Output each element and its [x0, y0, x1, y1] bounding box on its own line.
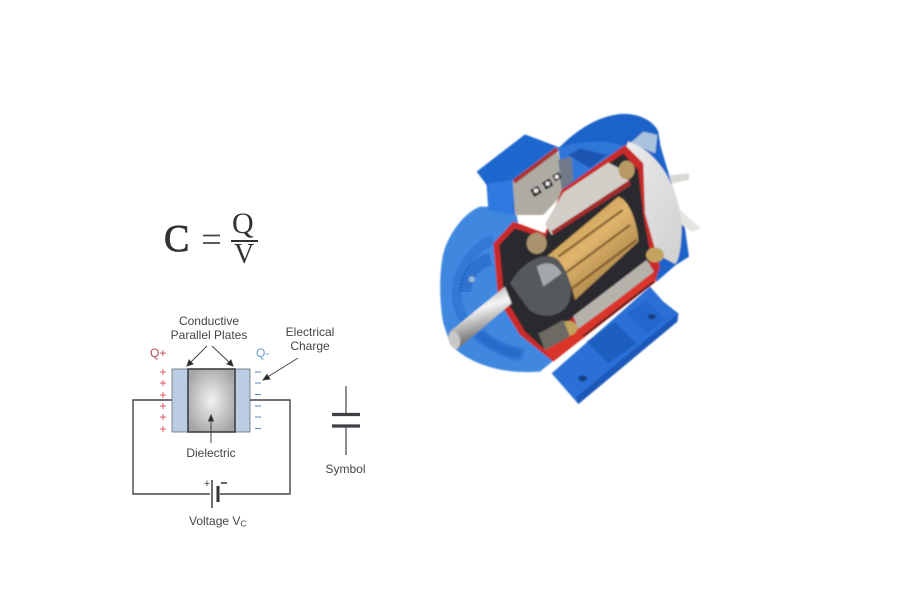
formula symbol C: C	[164, 218, 189, 260]
dark motor interior	[499, 153, 652, 348]
label conductive parallel plates: Parallel Plates	[171, 328, 247, 342]
label conductive parallel plates: Conductive	[179, 314, 239, 328]
positive charges: +	[159, 410, 167, 424]
formula: capacitance equals charge over voltage	[164, 207, 258, 270]
label dielectric: Dielectric	[186, 446, 236, 460]
capacitor circuit diagram	[133, 314, 366, 528]
gold rotor	[547, 197, 638, 300]
arrows to plates	[187, 346, 233, 366]
label Q+: Q+	[150, 346, 166, 360]
upper stator	[527, 161, 635, 254]
lower stator	[543, 248, 664, 361]
right conductive plate	[235, 369, 250, 432]
positive charges	[159, 365, 167, 436]
positive charges: +	[159, 399, 167, 413]
label voltage: Voltage V	[189, 514, 240, 528]
circuit wire	[133, 400, 290, 494]
capacitor symbol	[332, 386, 360, 455]
electric motor cutaway illustration	[440, 114, 701, 404]
label electrical charge: Charge	[290, 339, 330, 353]
arrow to charge	[263, 358, 298, 380]
positive charges: +	[159, 376, 167, 390]
equals sign	[203, 236, 220, 243]
label Q-: Q-	[256, 346, 269, 360]
mounting feet	[552, 287, 678, 404]
label voltage: C	[240, 518, 247, 528]
motor front end bell	[440, 207, 558, 372]
label electrical charge: Electrical	[286, 325, 334, 339]
positive charges: +	[159, 365, 167, 379]
denominator V: V	[234, 239, 254, 270]
red cutaway housing	[493, 145, 660, 362]
numerator Q: Q	[232, 207, 254, 240]
cooling fan	[617, 142, 701, 264]
end winding	[538, 320, 570, 350]
battery symbol: +	[204, 478, 210, 490]
left conductive plate	[172, 369, 188, 432]
fan cover top	[558, 114, 689, 282]
positive charges: +	[159, 388, 167, 402]
terminal box	[477, 134, 573, 215]
positive charges: +	[159, 422, 167, 436]
fraction bar	[231, 240, 258, 242]
dielectric block	[188, 369, 235, 432]
label symbol: Symbol	[325, 462, 366, 476]
arrow to dielectric	[208, 415, 214, 443]
battery symbol	[204, 478, 227, 508]
negative charges	[255, 372, 261, 428]
output shaft	[447, 287, 512, 350]
rotor end cap	[510, 256, 571, 316]
